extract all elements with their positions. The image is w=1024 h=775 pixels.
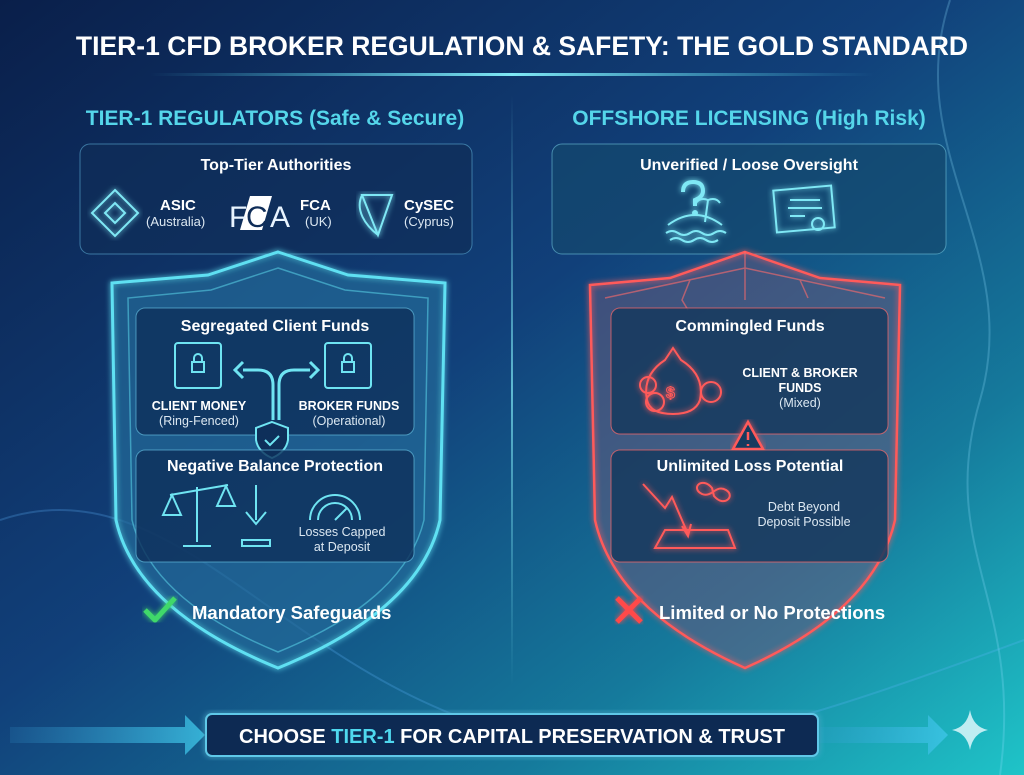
panel: top-tier authorities: (UK) [305,214,332,229]
icon: money bags: $ [666,385,675,402]
icon: money bags [640,348,721,414]
panel: commingled funds [611,308,888,434]
panel: unlimited loss: Debt Beyond [768,500,840,514]
panel: unverified oversight: Unverified / Loose Oversight [640,157,859,174]
icon: down arrow [242,485,270,546]
panel: segregated client funds: (Ring-Fenced) [159,414,239,428]
panel: top-tier authorities [80,144,472,254]
icon: CySEC [360,195,392,235]
panel: top-tier authorities: (Australia) [146,214,205,229]
icon: warning [733,422,763,449]
panel: segregated client funds: Segregated Client Funds [181,318,369,335]
left shield [112,252,445,668]
panel: negative balance protection [136,450,414,562]
icon: FCA: C [246,201,268,234]
panel: segregated client funds: CLIENT MONEY [152,399,247,413]
right heading: OFFSHORE LICENSING (High Risk) [572,107,926,130]
panel: unlimited loss [611,450,888,562]
icon: certificate [773,186,835,232]
title: TIER-1 CFD BROKER REGULATION & SAFETY: THE GOLD STANDARD [76,31,968,61]
icon: safe right [325,343,371,388]
icon: check shield [256,422,288,458]
icon: island question [666,182,726,242]
icon: split arrow [235,362,318,420]
panel: top-tier authorities: (Cyprus) [404,214,454,229]
panel: unlimited loss: Unlimited Loss Potential [657,458,843,475]
right footer: limited protections: Limited or No Protections [659,602,885,623]
right shield (cracked, red) [590,252,900,668]
panel: commingled funds: (Mixed) [779,396,821,410]
icon: scales [163,485,235,546]
panel: segregated client funds: BROKER FUNDS [299,399,399,413]
panel: segregated client funds [136,308,414,435]
icon: ASIC [92,190,138,236]
panel: commingled funds: CLIENT & BROKER [742,366,858,380]
icon: FCA: A [270,201,290,234]
panel: segregated client funds: (Operational) [313,414,385,428]
icon: FCA: F [229,201,247,234]
icon: sparkle [952,710,988,750]
icon: crash arrow [643,483,735,548]
icon: gauge [310,495,360,520]
panel: negative balance protection: at Deposit [314,540,371,554]
bottom banner [206,714,818,756]
left footer: mandatory safeguards: Mandatory Safeguards [192,602,391,623]
panel: negative balance protection: Losses Capped [299,525,385,539]
left footer: mandatory safeguards [145,598,391,623]
arrow: left [10,715,205,755]
panel: commingled funds: Commingled Funds [675,318,825,335]
icon: FCA [229,196,290,234]
panel: unlimited loss: Deposit Possible [757,515,851,529]
left heading: TIER-1 REGULATORS (Safe & Secure) [86,107,464,130]
arrow: right [820,715,948,755]
bottom banner: CHOOSE TIER-1 FOR CAPITAL PRESERVATION & TRUST [239,726,785,748]
icon: safe left [175,343,221,388]
panel: top-tier authorities: Top-Tier Authorities [201,157,352,174]
panel: top-tier authorities: ASIC [160,197,196,214]
panel: unverified oversight [552,144,946,254]
panel: top-tier authorities: FCA [300,197,331,214]
panel: negative balance protection: Negative Balance Protection [167,458,383,475]
panel: commingled funds: FUNDS [778,381,822,395]
panel: top-tier authorities: CySEC [404,197,454,214]
